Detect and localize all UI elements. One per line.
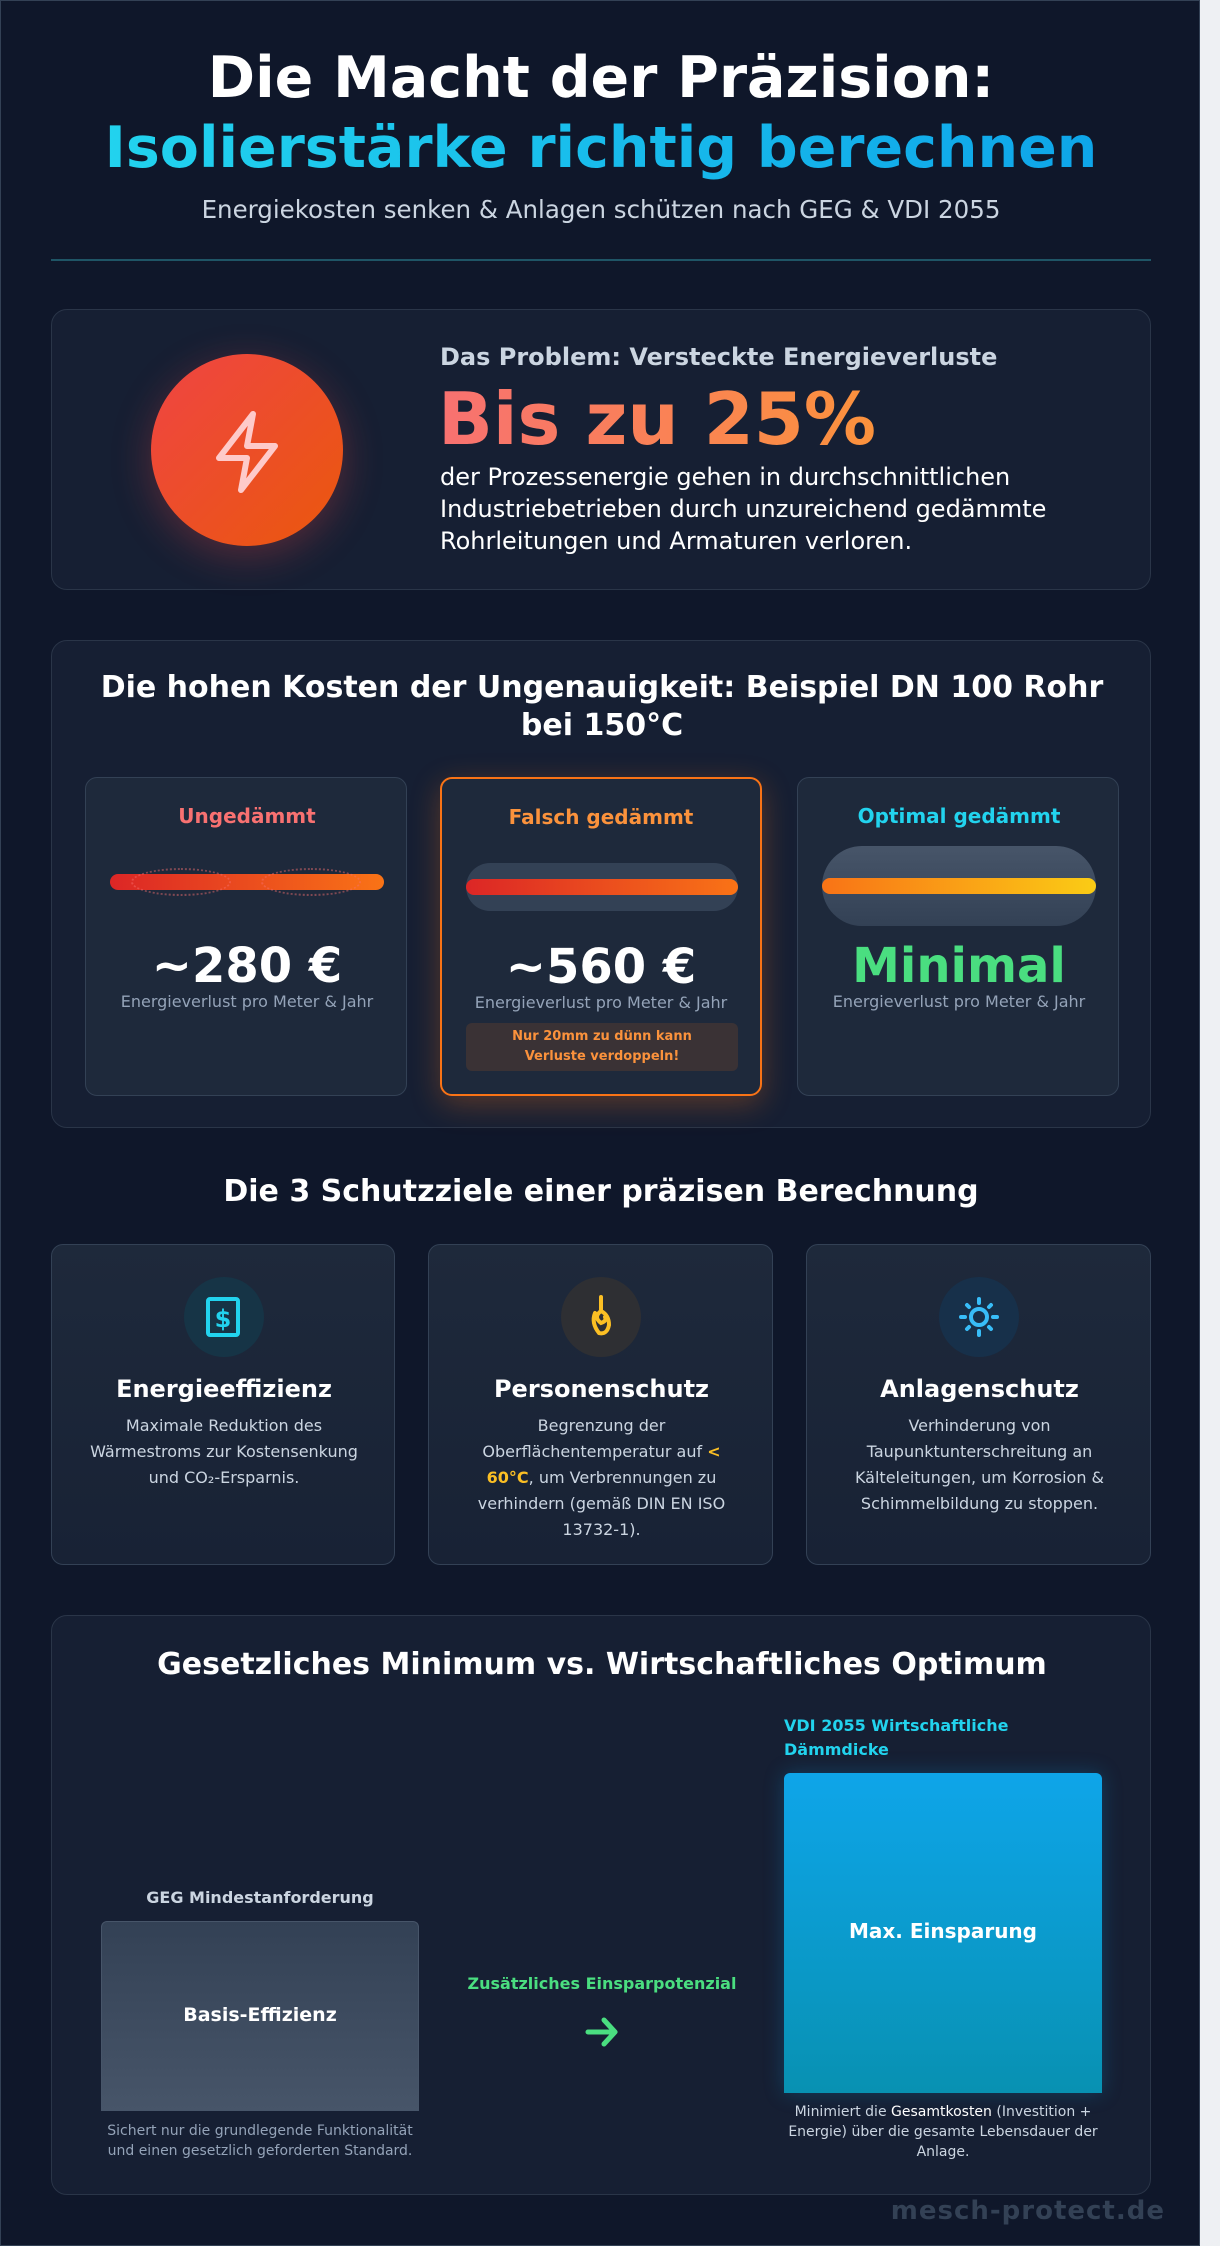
costs heading — [101, 670, 1104, 743]
right bar: VDI: Minimiert die Gesamtkosten (Investition + Energie) über die gesamte Lebensdauer der Anlage. — [788, 2104, 1098, 2160]
panel: problem — [51, 309, 1151, 590]
left bar: GEG: GEG Mindestanforderung — [146, 1888, 374, 1907]
callout: Verluste verdoppeln! — [525, 1049, 679, 1064]
panel: comparison — [51, 1615, 1151, 2195]
pipe bare — [110, 874, 384, 890]
title: Isolierstärke richtig berechnen — [105, 115, 1097, 181]
big stat: Bis zu 25% — [438, 377, 876, 461]
card: personenschutz: Personenschutz — [494, 1375, 709, 1403]
card: energieeffizienz — [51, 1244, 395, 1565]
card: falsch gedämmt: Energieverlust pro Meter & Jahr — [475, 993, 727, 1012]
middle: savings arrow — [468, 1974, 736, 2046]
icon: hand — [561, 1277, 641, 1357]
card: optimal — [797, 777, 1119, 1096]
icon: money: $ — [215, 1305, 231, 1333]
card: anlagenschutz: Verhinderung von Taupunktunterschreitung an Kälteleitungen, um Korrosion & Schimmelbildung zu stoppen. — [855, 1416, 1104, 1513]
right bar: VDI: Max. Einsparung — [849, 1919, 1037, 1943]
heading: schutzziele: Die 3 Schutzziele einer präzisen Berechnung — [223, 1174, 979, 1209]
right bar: VDI — [776, 1716, 1110, 2160]
card: optimal: Optimal gedämmt — [858, 804, 1060, 828]
panel: costs — [51, 640, 1151, 1128]
costs heading: Die hohen Kosten der Ungenauigkeit: Beispiel DN 100 Rohr — [101, 670, 1103, 705]
subtitle: Energiekosten senken & Anlagen schützen nach GEG & VDI 2055 — [202, 195, 1000, 224]
icon: lightning — [151, 354, 343, 546]
card: energieeffizienz: Energieeffizienz — [116, 1375, 332, 1403]
problem heading: Das Problem: Versteckte Energieverluste — [440, 343, 997, 371]
card: falsch gedämmt — [440, 777, 762, 1096]
card: optimal: Energieverlust pro Meter & Jahr — [833, 992, 1085, 1011]
card: energieeffizienz: Maximale Reduktion des Wärmestroms zur Kostensenkung und CO₂-Ersparnis. — [90, 1416, 358, 1487]
card: ungedämmt — [85, 777, 407, 1096]
left bar: GEG — [101, 1888, 419, 2159]
middle: savings arrow: Zusätzliches Einsparpotenzial — [468, 1974, 736, 1993]
comparison heading: Gesetzliches Minimum vs. Wirtschaftliches Optimum — [157, 1647, 1047, 1682]
card: ungedämmt: Ungedämmt — [178, 804, 316, 828]
callout: Nur 20mm zu dünn kann — [512, 1029, 692, 1044]
title — [105, 45, 1097, 181]
costs heading: bei 150°C — [521, 708, 683, 743]
card: anlagenschutz: Anlagenschutz — [880, 1375, 1079, 1403]
icon: money — [184, 1277, 264, 1357]
left bar: GEG: Basis-Effizienz — [183, 2004, 337, 2026]
card: optimal: Minimal — [852, 938, 1066, 994]
left bar: GEG: Sichert nur die grundlegende Funktionalität und einen gesetzlich geforderten Standard. — [107, 2123, 413, 2159]
pipe thin insulation — [466, 863, 738, 911]
card: falsch gedämmt: ~560 € — [506, 939, 696, 995]
callout — [466, 1023, 738, 1071]
icon: sun — [939, 1277, 1019, 1357]
pipe thick insulation — [822, 846, 1096, 926]
card: personenschutz: Begrenzung der Oberflächentemperatur auf < 60°C, um Verbrennungen zu verhindern (gemäß DIN EN ISO 13732-1). — [478, 1416, 725, 1539]
card: ungedämmt: ~280 € — [152, 938, 342, 994]
card: personenschutz — [428, 1244, 773, 1565]
card: anlagenschutz — [806, 1244, 1151, 1565]
title: Die Macht der Präzision: — [208, 45, 994, 111]
footer brand: mesch-protect.de — [891, 2196, 1165, 2226]
card: ungedämmt: Energieverlust pro Meter & Jahr — [121, 992, 373, 1011]
right bar: VDI: VDI 2055 Wirtschaftliche Dämmdicke — [784, 1716, 1008, 1759]
problem text: der Prozessenergie gehen in durchschnittlichen Industriebetrieben durch unzureichend gedämmte Rohrleitungen und Armaturen verloren. — [440, 463, 1046, 555]
card: falsch gedämmt: Falsch gedämmt — [509, 805, 693, 829]
